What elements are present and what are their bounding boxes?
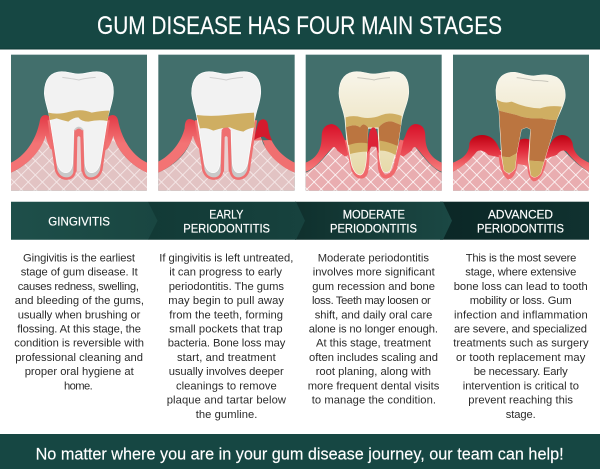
- stage header: early periodontitis: [148, 202, 305, 240]
- text block: gingivitis description: and bleeding of the gums,: [15, 295, 144, 307]
- text block: moderate periodontitis description: often includes scaling and: [309, 352, 438, 364]
- text block: gingivitis description: stage of gum disease. It: [21, 266, 139, 278]
- stage header: moderate periodontitis: PERIODONTITIS: [330, 222, 417, 236]
- text block: moderate periodontitis description: root planing, along with: [316, 366, 431, 378]
- stage header: early periodontitis: PERIODONTITIS: [183, 222, 270, 236]
- footer banner: [0, 434, 600, 469]
- text block: early periodontitis description: the gumline.: [196, 409, 257, 421]
- text block: moderate periodontitis description: Moderate periodontitis: [318, 252, 429, 264]
- panel: gingivitis tooth illustration: [11, 55, 147, 191]
- text block: gingivitis description: causes redness, swelling,: [18, 281, 139, 293]
- text block: gingivitis description: condition is reversible with: [14, 338, 144, 350]
- text block: advanced periodontitis description: be necessary. Early: [474, 366, 568, 378]
- stage header bar: [11, 202, 589, 240]
- text block: advanced periodontitis description: [453, 252, 589, 421]
- text block: early periodontitis description: it can progress to early: [169, 266, 282, 278]
- text block: moderate periodontitis description: gum recession and bone: [312, 281, 435, 293]
- stage header: early periodontitis: EARLY: [209, 207, 243, 221]
- panel: early periodontitis tooth illustration: [158, 55, 295, 191]
- text block: gingivitis description: proper oral hygiene at: [25, 366, 135, 378]
- stage header: gingivitis: GINGIVITIS: [48, 215, 110, 229]
- stage header: moderate periodontitis: MODERATE: [343, 207, 405, 221]
- stage header: advanced periodontitis: [440, 202, 589, 240]
- title banner: GUM DISEASE HAS FOUR MAIN STAGES: [97, 12, 502, 40]
- text block: gingivitis description: Gingivitis is the earliest: [23, 252, 136, 264]
- text block: moderate periodontitis description: At this stage, treatment: [316, 338, 432, 350]
- text block: advanced periodontitis description: are severe, and specialized: [454, 324, 587, 336]
- text block: moderate periodontitis description: [308, 252, 440, 407]
- text block: advanced periodontitis description: treatments such as surgery: [453, 338, 589, 350]
- text block: gingivitis description: [14, 252, 144, 392]
- text block: early periodontitis description: bacteria. Bone loss may: [168, 338, 286, 350]
- stage header: advanced periodontitis: PERIODONTITIS: [477, 222, 564, 236]
- text block: early periodontitis description: cleanings to remove: [176, 380, 277, 392]
- text block: moderate periodontitis description: involves more significant: [313, 266, 436, 278]
- text block: gingivitis description: flossing. At this stage, the: [17, 324, 141, 336]
- stage header: advanced periodontitis: ADVANCED: [488, 207, 553, 221]
- text block: early periodontitis description: [159, 252, 293, 421]
- text block: moderate periodontitis description: loss. Teeth may loosen or: [312, 295, 431, 307]
- text block: advanced periodontitis description: stage, where extensive: [465, 266, 576, 278]
- title banner: [0, 0, 600, 50]
- text block: gingivitis description: usually when brushing or: [18, 309, 141, 321]
- panel: moderate periodontitis tooth illustration: [306, 55, 442, 191]
- text block: advanced periodontitis description: prevent reaching this: [468, 395, 573, 407]
- text block: advanced periodontitis description: intervention is critical to: [463, 380, 579, 392]
- stage header: moderate periodontitis: [295, 202, 452, 240]
- text block: gingivitis description: professional cleaning and: [15, 352, 143, 364]
- text block: moderate periodontitis description: to manage the condition.: [312, 395, 436, 407]
- text block: advanced periodontitis description: mobility or loss. Gum: [470, 295, 572, 307]
- text block: early periodontitis description: may begin to pull away: [168, 295, 284, 307]
- text block: early periodontitis description: plaque and tartar below: [167, 395, 287, 407]
- text block: moderate periodontitis description: more frequent dental visits: [308, 380, 440, 392]
- text block: advanced periodontitis description: stage.: [506, 409, 536, 421]
- text block: advanced periodontitis description: bone loss can lead to tooth: [454, 281, 588, 293]
- text block: early periodontitis description: start, and treatment: [177, 352, 277, 364]
- text block: early periodontitis description: from the teeth, forming: [169, 309, 283, 321]
- text block: early periodontitis description: usually involves deeper: [169, 366, 284, 378]
- footer banner: No matter where you are in your gum disease journey, our team can help!: [36, 446, 564, 464]
- text block: early periodontitis description: periodontitis. The gums: [169, 281, 284, 293]
- text block: moderate periodontitis description: shift, and daily oral care: [315, 309, 432, 321]
- text block: advanced periodontitis description: infection and inflammation: [454, 309, 588, 321]
- text block: advanced periodontitis description: or tooth replacement may: [456, 352, 586, 364]
- text block: advanced periodontitis description: This is the most severe: [466, 252, 576, 264]
- stage header: gingivitis: [11, 202, 158, 240]
- text block: gingivitis description: home.: [64, 380, 93, 392]
- panel: advanced periodontitis tooth illustration: [453, 55, 589, 191]
- text block: early periodontitis description: If gingivitis is left untreated,: [159, 252, 293, 264]
- text block: moderate periodontitis description: alone is no longer enough.: [309, 324, 438, 336]
- text block: early periodontitis description: small pockets that trap: [169, 324, 283, 336]
